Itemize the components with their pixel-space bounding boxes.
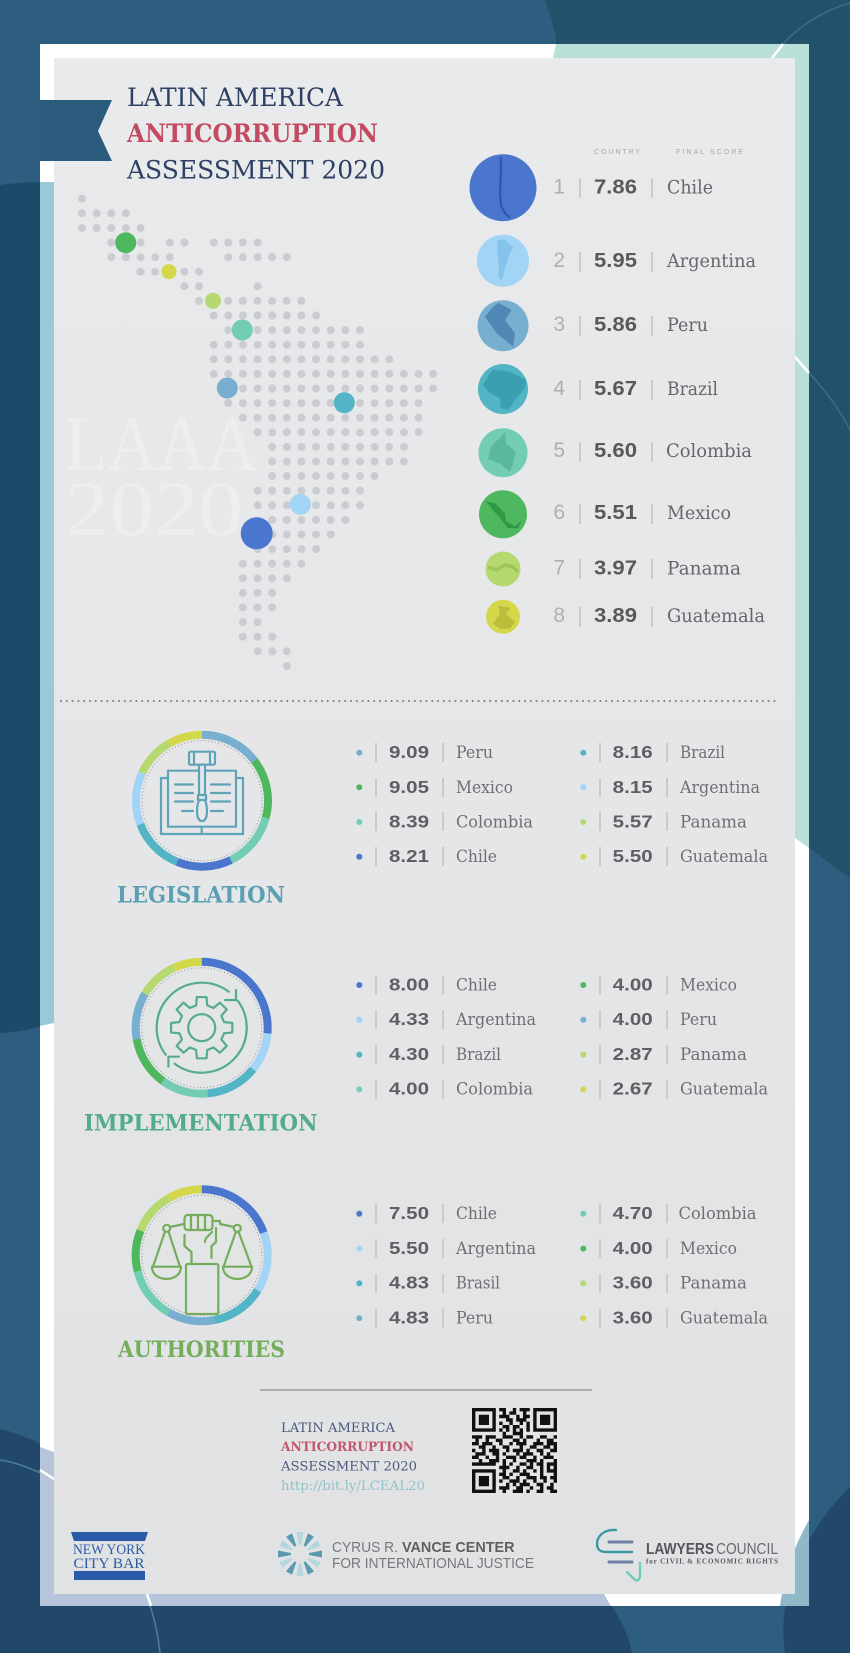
section: Implementation [84,935,768,1137]
section: Legislation [109,708,768,909]
scores: Legislation: Brazil [680,743,725,762]
marker: Guatemala [162,264,176,279]
marker: Peru [217,378,238,398]
QR code [470,1406,559,1495]
scores: Implementation: Colombia [456,1080,533,1099]
scores: Legislation: Panama [680,812,747,832]
ring: Legislation [109,708,295,893]
logo: Lawyers Council: LAWYERS [646,1541,714,1558]
row: Panama: 7 [553,557,565,580]
row: Panama: 3.97 [594,557,637,580]
heading: Legislation: LEGISLATION [117,883,285,909]
scores: Legislation: 9.09 [389,742,429,762]
icon: raised fist holding scales [152,1215,252,1314]
row: Peru: Peru [667,314,708,336]
footer title and link: LATIN AMERICA [281,1421,396,1436]
watermark LAAA 2020: LAAA [65,400,257,487]
row: Brazil: 5.67 [594,377,637,400]
scores: Legislation: 8.21 [389,846,429,866]
scores: Authorities: Brasil [456,1274,500,1293]
marker: Chile [241,517,273,549]
row: Peru: 5.86 [594,313,637,336]
section: Authorities [111,1164,768,1363]
row: Brazil [478,364,718,414]
scores: Legislation: Peru [456,743,493,762]
row: Guatemala [486,600,765,634]
title: ASSESSMENT 2020 [126,155,385,184]
column headers: COUNTRY [594,149,640,156]
icon: gavel on open book [161,752,243,834]
scores: Legislation: Argentina [679,778,760,797]
scores: Authorities: 5.50 [389,1238,429,1258]
row: Panama [486,552,741,586]
scores: Implementation [356,974,768,1099]
scores: Implementation: Brazil [456,1045,501,1064]
scores: Authorities: Colombia [678,1204,757,1223]
scores: Authorities: Panama [680,1274,747,1293]
logo: Vance Center: FOR INTERNATIONAL JUSTICE [332,1555,534,1572]
row: Peru: 3 [553,313,565,336]
scores: Authorities: 4.83 [389,1273,429,1293]
scores: Implementation: 2.87 [613,1044,653,1064]
title: LATIN AMERICA [127,83,344,112]
watermark LAAA 2020 [65,400,257,552]
icon: Lawyers Council mark [597,1530,640,1580]
scores: Legislation: 5.57 [613,812,653,832]
row: Chile: Chile [667,177,713,199]
heading: Authorities: AUTHORITIES [117,1337,285,1363]
scores: Authorities: 4.00 [613,1238,653,1258]
scores: Authorities: 3.60 [613,1273,653,1293]
logo: Vance Center [278,1532,534,1576]
scores: Authorities: Mexico [680,1239,737,1258]
title: ANTICORRUPTION [126,119,378,148]
ring: Implementation [109,935,295,1121]
marker: Panama [205,293,221,309]
logo: Lawyers Council: for CIVIL & ECONOMIC RIGHTS [646,1558,778,1566]
heading: Implementation: IMPLEMENTATION [84,1111,318,1137]
column headers: FINAL SCORE [676,149,743,156]
row: Colombia: 5 [553,439,565,462]
row: Colombia [478,428,752,477]
logo: Lawyers Council: COUNCIL [716,1541,778,1558]
row: Argentina: 2 [553,249,565,272]
scores: Legislation: Colombia [456,812,533,832]
row: Guatemala: 8 [553,604,565,627]
scores: Authorities: 4.83 [389,1308,429,1328]
footer title and link: ANTICORRUPTION [280,1440,414,1455]
scores: Authorities: 7.50 [389,1203,429,1223]
scores: Implementation: 8.00 [389,974,429,994]
dot map of Latin America [82,199,433,666]
footer title and link: http://bit.ly/LCEAL20 [281,1479,425,1494]
scores: Implementation: Panama [680,1045,747,1064]
scores: Implementation: Peru [680,1010,717,1029]
final score ranking [470,154,765,634]
marker: Argentina [290,494,311,515]
row: Brazil: 4 [553,377,565,400]
marker: Colombia [232,320,253,340]
scores: Implementation: 4.00 [613,974,653,994]
scores: Implementation: Argentina [455,1010,536,1029]
scores: Legislation: 5.50 [613,846,653,866]
row: Chile: 1 [553,176,565,199]
scores: Legislation: 8.39 [389,812,429,832]
scores: Legislation: Chile [456,847,497,866]
row: Guatemala: 3.89 [594,604,637,627]
footer title and link [280,1421,425,1494]
row: Peru [478,300,708,351]
icon: gear with cycle arrows [157,983,247,1073]
scores: Authorities: 4.70 [613,1203,653,1223]
column headers [594,149,743,156]
scores: Legislation: 8.15 [613,777,653,797]
scores: Legislation: 9.05 [389,777,429,797]
scores: Legislation: Mexico [456,778,513,797]
scores: Implementation: Mexico [680,975,737,994]
scores: Implementation: Guatemala [680,1080,768,1099]
scores: Implementation: 2.67 [613,1079,653,1099]
logo: Lawyers Council [597,1530,778,1580]
scores: Authorities: Guatemala [680,1309,768,1328]
row: Argentina: Argentina [666,250,756,272]
row: Mexico: 6 [553,501,565,524]
row: Brazil: Brazil [667,378,718,400]
scores: Authorities: 3.60 [613,1308,653,1328]
scores: Authorities: Chile [456,1204,497,1223]
logo: New York City Bar: NEW YORK [73,1542,145,1558]
row: Colombia: Colombia [666,440,752,462]
watermark LAAA 2020: 2020 [65,465,243,552]
marker: Brazil [334,392,355,413]
scores: Legislation: Guatemala [680,847,768,866]
row: Guatemala: Guatemala [667,605,765,627]
row: Panama: Panama [667,558,741,580]
row: Mexico [479,490,731,538]
scores: Implementation: 4.30 [389,1044,429,1064]
logo: New York City Bar [71,1532,148,1580]
marker: Mexico [115,232,136,253]
scores: Legislation: 8.16 [613,742,653,762]
scores: Legislation [356,742,768,866]
footer title and link: ASSESSMENT 2020 [280,1460,417,1475]
row: Chile: 7.86 [594,176,637,199]
row: Chile [470,154,713,221]
row: Argentina [477,235,756,287]
row: Argentina: 5.95 [594,249,637,272]
title [126,83,385,184]
scores: Authorities [356,1203,768,1328]
scores: Implementation: 4.00 [613,1009,653,1029]
icon: Vance Center burst [278,1532,322,1576]
logo: Vance Center: VANCE CENTER [402,1539,515,1556]
row: Mexico: Mexico [667,502,731,524]
logo: Vance Center: CYRUS R. [332,1539,398,1556]
ring: Authorities [111,1164,293,1346]
row: Colombia: 5.60 [594,439,637,462]
scores: Authorities: Peru [456,1309,493,1328]
logo: New York City Bar: CITY BAR [74,1556,144,1572]
row: Mexico: 5.51 [594,501,637,524]
ribbon banner [40,100,112,161]
scores: Implementation: 4.00 [389,1079,429,1099]
scores: Implementation: 4.33 [389,1009,429,1029]
scores: Authorities: Argentina [455,1239,536,1258]
scores: Implementation: Chile [456,975,497,994]
